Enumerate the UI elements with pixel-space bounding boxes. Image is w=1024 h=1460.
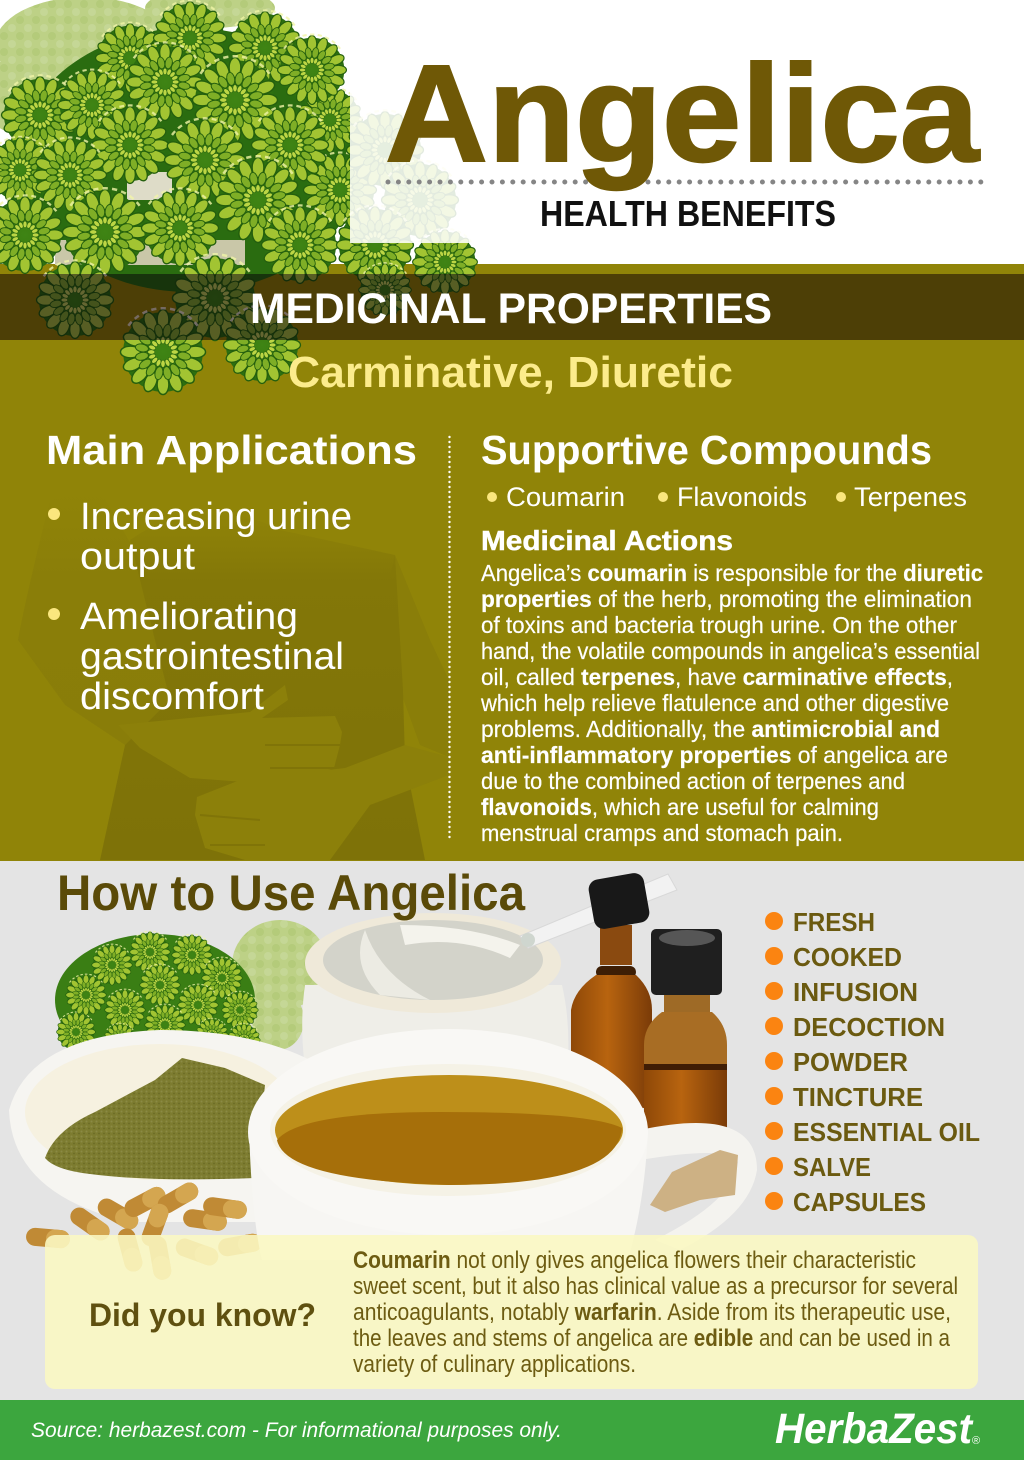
bullet: increasing urine output [48, 496, 352, 578]
bullet: ameliorating discomfort: Ameliorating [80, 596, 298, 638]
item: capsules: CAPSULES [793, 1187, 926, 1217]
properties subheading: Carminative, Diuretic [288, 348, 733, 397]
photo: angelica flower head [0, 0, 477, 395]
angelica root [650, 1150, 738, 1212]
compound list: Flavonoids [677, 482, 807, 512]
callout text [353, 1247, 958, 1378]
photo: capsules [25, 1179, 263, 1281]
bullet: ameliorating discomfort: discomfort [80, 676, 264, 718]
text: medicinal actions: anti-inflammatory properties of angelica are [481, 742, 948, 768]
compound list [487, 482, 967, 512]
callout heading: Did you know? [89, 1297, 316, 1333]
olive panel: medicinal properties [0, 264, 1024, 861]
text: medicinal actions: problems. Additionally, the antimicrobial and [481, 716, 940, 742]
panel: supportive compounds [480, 427, 983, 846]
logo: HerbaZest: ® [972, 1435, 980, 1447]
text: medicinal actions: Angelica’s coumarin is responsible for the diuretic [481, 560, 983, 586]
item: salve: SALVE [793, 1152, 871, 1182]
panel: how to use background [0, 861, 1024, 1400]
bullet: increasing urine output: output [80, 536, 195, 578]
item: decoction: DECOCTION [793, 1012, 945, 1042]
item: powder: POWDER [793, 1047, 908, 1077]
item: tincture: TINCTURE [793, 1082, 923, 1112]
callout text: Coumarin not only gives angelica flowers their characteristic [353, 1247, 916, 1274]
photo: pale flower sprig [232, 920, 328, 1050]
list: ways to use [765, 907, 980, 1217]
source note: Source: herbazest.com - For informational purposes only. [31, 1419, 562, 1442]
text: medicinal actions [480, 560, 983, 846]
item: infusion: INFUSION [793, 977, 918, 1007]
compound list: Coumarin [506, 482, 625, 512]
panel: main applications [46, 427, 417, 718]
pale background flower [0, 0, 275, 135]
callout text: the leaves and stems of angelica are edible and can be used in a [353, 1325, 951, 1352]
powder pile [45, 1058, 265, 1179]
text: medicinal actions: properties of the herb, promoting the elimination [481, 586, 972, 612]
title: Angelica [385, 37, 980, 191]
text: medicinal actions: hand, the volatile compounds in angelica’s essential [481, 638, 980, 664]
photo: fresh flower [55, 931, 260, 1066]
photo: tea cup [248, 1029, 757, 1260]
text: medicinal actions: menstrual cramps and stomach pain. [481, 820, 843, 846]
text: medicinal actions: due to the combined action of terpenes and [481, 768, 905, 794]
text: medicinal actions: of toxins and bacteria trough urine. On the other [481, 612, 957, 638]
heading: medicinal actions: Medicinal Actions [481, 525, 733, 556]
text: medicinal actions: flavonoids, which are useful for calming [481, 794, 879, 820]
text: medicinal actions: which help relieve flatulence and other digestive [480, 690, 949, 716]
item: salve [765, 1152, 871, 1182]
white title panel [350, 0, 1024, 243]
bullet: ameliorating discomfort: gastrointestinal [80, 636, 344, 678]
text: medicinal actions: oil, called terpenes, have carminative effects, [481, 664, 953, 690]
item: fresh: FRESH [793, 907, 875, 937]
heading: how to use angelica: How to Use Angelica [57, 865, 526, 921]
heading: supportive compounds: Supportive Compounds [481, 427, 932, 473]
subtitle: HEALTH BENEFITS [540, 193, 836, 234]
dotted divider under title [388, 180, 982, 184]
photo: bowl of powder [9, 1030, 310, 1222]
item: essential oil: ESSENTIAL OIL [793, 1117, 980, 1147]
heading: main applications: Main Applications [46, 427, 417, 473]
vertical dotted divider [448, 437, 451, 842]
banner heading: MEDICINAL PROPERTIES [250, 285, 772, 333]
footer [0, 1400, 1024, 1460]
photo: woman holding stomach [18, 490, 449, 860]
logo: HerbaZest: HerbaZest [775, 1405, 974, 1453]
callout: did you know [45, 1235, 978, 1389]
bullet: ameliorating discomfort [48, 596, 344, 718]
dark banner [0, 274, 1024, 340]
compound list: Terpenes [854, 482, 967, 512]
callout text: anticoagulants, notably warfarin. Aside from its therapeutic use, [353, 1299, 951, 1326]
bullet: increasing urine output: Increasing urine [80, 496, 352, 538]
photo: salve jar [302, 913, 568, 1060]
photo: essential oil bottle [644, 929, 727, 1135]
callout text: variety of culinary applications. [353, 1351, 636, 1378]
photo: dropper and amber bottle [520, 872, 677, 1110]
item: cooked: COOKED [793, 942, 902, 972]
